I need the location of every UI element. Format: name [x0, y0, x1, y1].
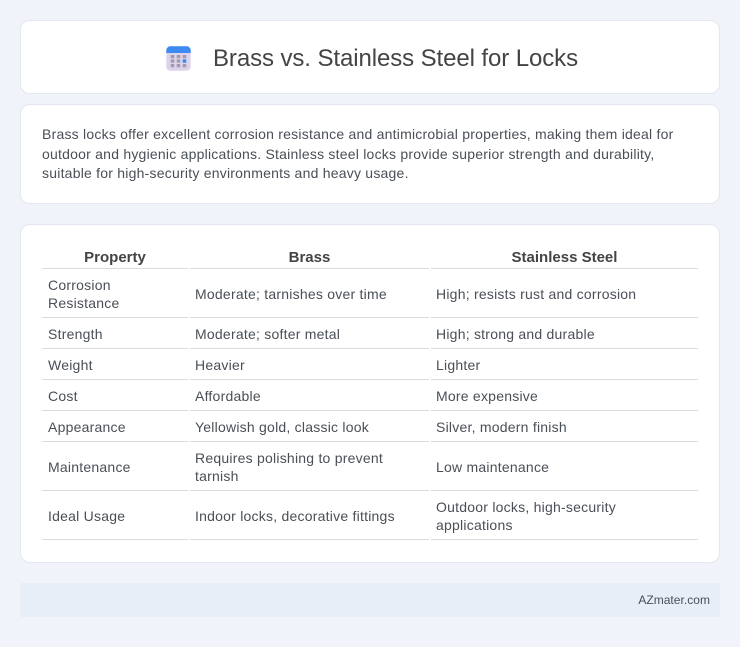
row: ideal usage: Ideal Usage — [48, 508, 125, 524]
row: cost: Cost — [48, 388, 78, 404]
row: strength: Moderate; softer metal — [195, 326, 340, 342]
row: maintenance — [48, 450, 549, 484]
row: ideal usage: Outdoor locks, high-security — [436, 499, 616, 515]
row: weight: Lighter — [436, 357, 480, 373]
intro paragraph: outdoor and hygienic applications. Stainless steel locks provide superior strength and durability, — [42, 146, 654, 162]
footer bar — [20, 583, 720, 617]
row: strength — [48, 326, 595, 342]
row: ideal usage: applications — [436, 517, 513, 533]
row: corrosion resistance: Corrosion — [48, 277, 111, 293]
row: maintenance: Low maintenance — [436, 459, 549, 475]
row: maintenance: Requires polishing to prevent — [195, 450, 383, 466]
row: appearance: Appearance — [48, 419, 126, 435]
panel: comparison table — [20, 224, 720, 563]
table header: Property — [84, 249, 146, 266]
icon: calendar — [166, 46, 191, 71]
row: cost — [48, 388, 538, 404]
row: strength: Strength — [48, 326, 103, 342]
panel: header — [20, 20, 720, 94]
row: corrosion resistance: Moderate; tarnishes over time — [195, 286, 387, 302]
row: weight: Weight — [48, 357, 93, 373]
row: strength: High; strong and durable — [436, 326, 595, 342]
row: appearance: Yellowish gold, classic look — [195, 419, 369, 435]
row: maintenance: Maintenance — [48, 459, 131, 475]
row: ideal usage — [48, 499, 616, 533]
intro paragraph: suitable for high-security environments and heavy usage. — [42, 165, 409, 181]
row: weight — [48, 357, 480, 373]
row: maintenance: tarnish — [195, 468, 239, 484]
row: cost: Affordable — [195, 388, 261, 404]
row: corrosion resistance: High; resists rust and corrosion — [436, 286, 636, 302]
row: cost: More expensive — [436, 388, 538, 404]
row: weight: Heavier — [195, 357, 245, 373]
table header: Stainless Steel — [512, 249, 617, 266]
table header: Brass — [289, 249, 330, 266]
row: appearance: Silver, modern finish — [436, 419, 567, 435]
title: Brass vs. Stainless Steel for Locks — [213, 45, 578, 72]
footer credit: AZmater.com — [638, 593, 710, 607]
intro paragraph: Brass locks offer excellent corrosion resistance and antimicrobial properties, making them ideal for — [42, 126, 674, 142]
table header — [84, 249, 617, 266]
row: appearance — [48, 419, 567, 435]
panel: intro text — [20, 104, 720, 204]
row: corrosion resistance — [48, 277, 636, 311]
row: ideal usage: Indoor locks, decorative fittings — [195, 508, 395, 524]
intro paragraph — [42, 126, 674, 181]
row: corrosion resistance: Resistance — [48, 295, 120, 311]
